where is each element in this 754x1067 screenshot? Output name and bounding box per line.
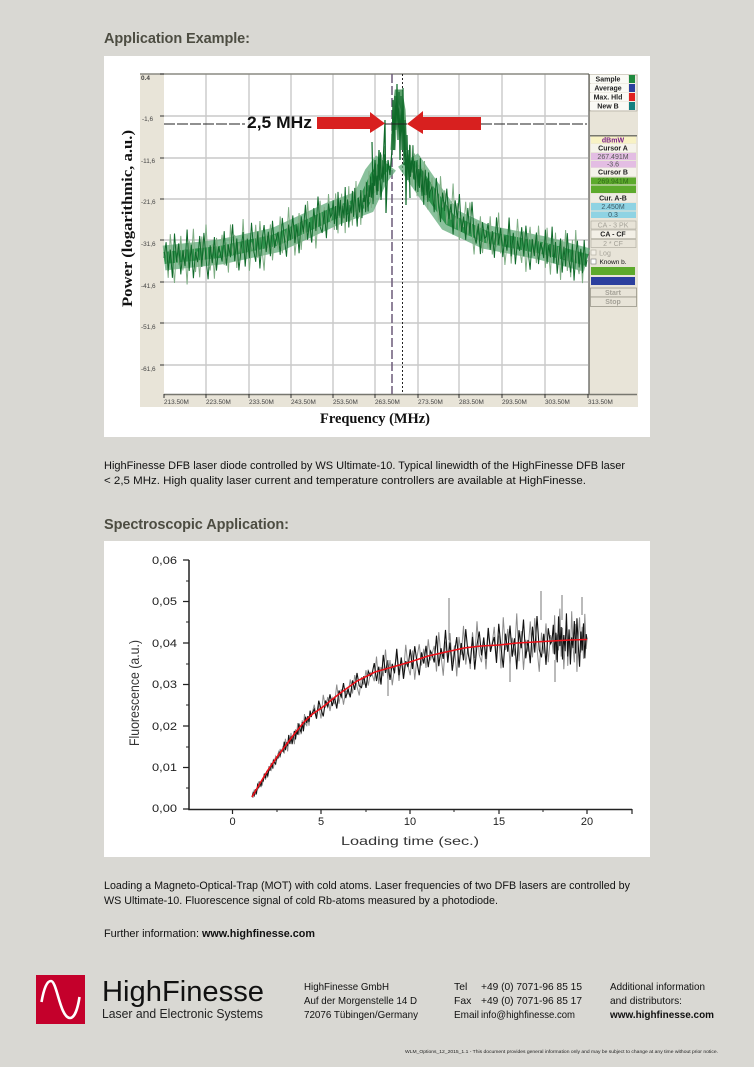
x axis tick labels: 303.50M: [545, 399, 570, 406]
x axis tick labels: 293.50M: [502, 399, 527, 406]
cursor readouts: 2.450M: [601, 204, 625, 211]
legend rows: Max. Hld: [594, 94, 622, 102]
footer: contact: +49 (0) 7071-96 85 17: [481, 996, 582, 1007]
footer: distributors: www.highfinesse.com: [609, 1010, 714, 1021]
x axis tick labels: 273.50M: [418, 399, 443, 406]
x tick labels: 0: [229, 816, 236, 828]
tagline: Laser and Electronic Systems: [102, 1007, 263, 1021]
y axis tick labels: -51,6: [141, 324, 156, 331]
label: 2,5 MHz: 2,5 MHz: [247, 113, 312, 132]
heading: Application Example: Application Example:: [104, 31, 250, 47]
mode buttons: CA - 3 PK: [598, 222, 629, 230]
y axis tick labels: -61,6: [141, 366, 156, 373]
x axis tick labels: 243.50M: [291, 399, 316, 406]
y axis tick labels: -1,6: [142, 116, 153, 123]
y tick labels: 0,06: [152, 555, 177, 567]
footer: contact: [454, 982, 582, 1021]
axes and ticks: [183, 560, 632, 814]
caption: DFB laser: HighFinesse DFB laser diode controlled by WS Ultimate-10. Typical linewidth of the HighFinesse DFB laser: [104, 460, 625, 472]
further information: [104, 928, 315, 940]
x axis tick labels: 263.50M: [375, 399, 400, 406]
legend rows: New B: [597, 104, 619, 110]
side control panel: [590, 75, 637, 306]
panel: fluorescence chart: [104, 541, 650, 857]
x axis tick labels: [164, 399, 613, 406]
footer: contact: Fax: [454, 996, 472, 1007]
further information: Further information:: [104, 928, 199, 940]
cursor readouts: 0.3: [608, 212, 618, 219]
y axis title: Fluorescence (a.u.): [126, 640, 142, 746]
y axis tick labels: -21,6: [141, 199, 156, 206]
footer: distributors: Additional information: [610, 982, 705, 993]
cursor readouts: Cur. A-B: [599, 196, 627, 202]
caption: MOT: Loading a Magneto-Optical-Trap (MOT) with cold atoms. Laser frequencies of two DFB lasers are controlled by: [104, 880, 630, 892]
x axis title: Frequency (MHz): [320, 411, 430, 427]
red fit curve: [252, 640, 587, 797]
y tick labels: 0,01: [152, 762, 177, 774]
footer: address: HighFinesse GmbH: [304, 982, 389, 993]
y tick labels: 0,04: [152, 638, 177, 650]
caption: DFB laser: < 2,5 MHz. High quality laser current and temperature controllers are available at HighFinesse.: [104, 475, 586, 487]
x tick labels: 5: [318, 816, 324, 828]
cursor readouts: -3.6: [607, 162, 619, 168]
footer: address: 72076 Tübingen/Germany: [304, 1010, 419, 1021]
heading: Spectroscopic Application: Spectroscopic Application:: [104, 517, 289, 533]
caption: MOT: [104, 880, 630, 907]
cursor lines: [392, 74, 402, 394]
y tick labels: 0,02: [152, 721, 177, 733]
arrow: right red: [407, 111, 481, 134]
wordmark: HighFinesse: [102, 976, 264, 1008]
x tick labels: 15: [493, 816, 505, 828]
x axis tick labels: 233.50M: [249, 399, 274, 406]
cursor readouts: [590, 135, 637, 219]
mode buttons: CA - CF: [600, 232, 626, 238]
footer: contact: Tel: [454, 982, 467, 993]
icon: red square with sine wave: [36, 975, 85, 1024]
y tick labels: 0,00: [152, 803, 177, 815]
footer: address: Auf der Morgenstelle 14 D: [304, 996, 417, 1007]
y axis tick labels: [141, 75, 156, 373]
arrow: left red: [317, 112, 385, 133]
footer: contact: info@highfinesse.com: [481, 1010, 575, 1021]
checkboxes: [591, 250, 627, 266]
mode buttons: 2 * CF: [603, 241, 623, 248]
x tick labels: 10: [404, 816, 416, 828]
x axis tick labels: 283.50M: [459, 399, 484, 406]
cursor readouts: Cursor B: [598, 170, 628, 176]
y tick labels: 0,03: [152, 679, 177, 691]
y axis tick labels: -31,6: [141, 241, 156, 248]
x axis tick labels: 253.50M: [333, 399, 358, 406]
caption: MOT: WS Ultimate-10. Fluorescence signal of cold Rb-atoms measured by a photodiode.: [104, 895, 498, 907]
start stop buttons: Start: [605, 290, 622, 297]
noisy data trace: [252, 591, 587, 802]
y axis tick labels: -41,6: [141, 283, 156, 290]
further information: www.highfinesse.com: [201, 928, 315, 940]
x tick labels: 20: [581, 816, 593, 828]
checkboxes: Known b.: [599, 259, 627, 266]
cursor readouts: dBmW: [602, 138, 624, 144]
x tick labels: [229, 816, 593, 828]
cursor readouts: 267.491M: [597, 154, 629, 161]
legend rows: [590, 75, 635, 110]
y axis title: Power (logarithmic, a.u.): [120, 130, 136, 307]
plot gridlines: [140, 74, 637, 398]
mode buttons: [591, 221, 636, 248]
dashed 2.5 MHz level line: [164, 123, 587, 125]
checkboxes: Log: [599, 250, 611, 258]
footer: contact: +49 (0) 7071-96 85 15: [481, 982, 582, 993]
colour bars: [591, 267, 635, 285]
x axis tick labels: 223.50M: [206, 399, 231, 406]
footer: contact: Email: [454, 1010, 479, 1021]
footer: distributors: and distributors:: [610, 996, 682, 1007]
panel: laser linewidth chart: [104, 56, 650, 437]
legend rows: Sample: [596, 76, 621, 84]
y tick labels: 0,05: [152, 596, 177, 608]
footer: address: [304, 982, 419, 1021]
start stop buttons: [590, 288, 636, 306]
cursor readouts: Cursor A: [598, 146, 628, 152]
logo: HighFinesse: [36, 975, 264, 1024]
x axis title: Loading time (sec.): [341, 834, 479, 848]
footer: disclaimer: WLM_Options_12_2015_1.1 - This document provides general information only and may be subject to change at any time without prior notice.: [405, 1049, 718, 1055]
cursor readouts: 269.941M: [597, 178, 629, 186]
y tick labels: [152, 555, 177, 815]
y axis tick labels: -11,6: [141, 158, 156, 165]
caption: DFB laser: [104, 460, 625, 487]
footer: distributors: [609, 982, 714, 1021]
start stop buttons: Stop: [605, 299, 621, 306]
x axis tick labels: 213.50M: [164, 399, 189, 406]
y axis tick labels: 0.4: [141, 75, 150, 82]
legend rows: Average: [594, 86, 622, 92]
green spectrum trace: [164, 84, 587, 287]
x axis tick labels: 313.50M: [588, 399, 613, 406]
chart frame gutters: [140, 74, 638, 407]
